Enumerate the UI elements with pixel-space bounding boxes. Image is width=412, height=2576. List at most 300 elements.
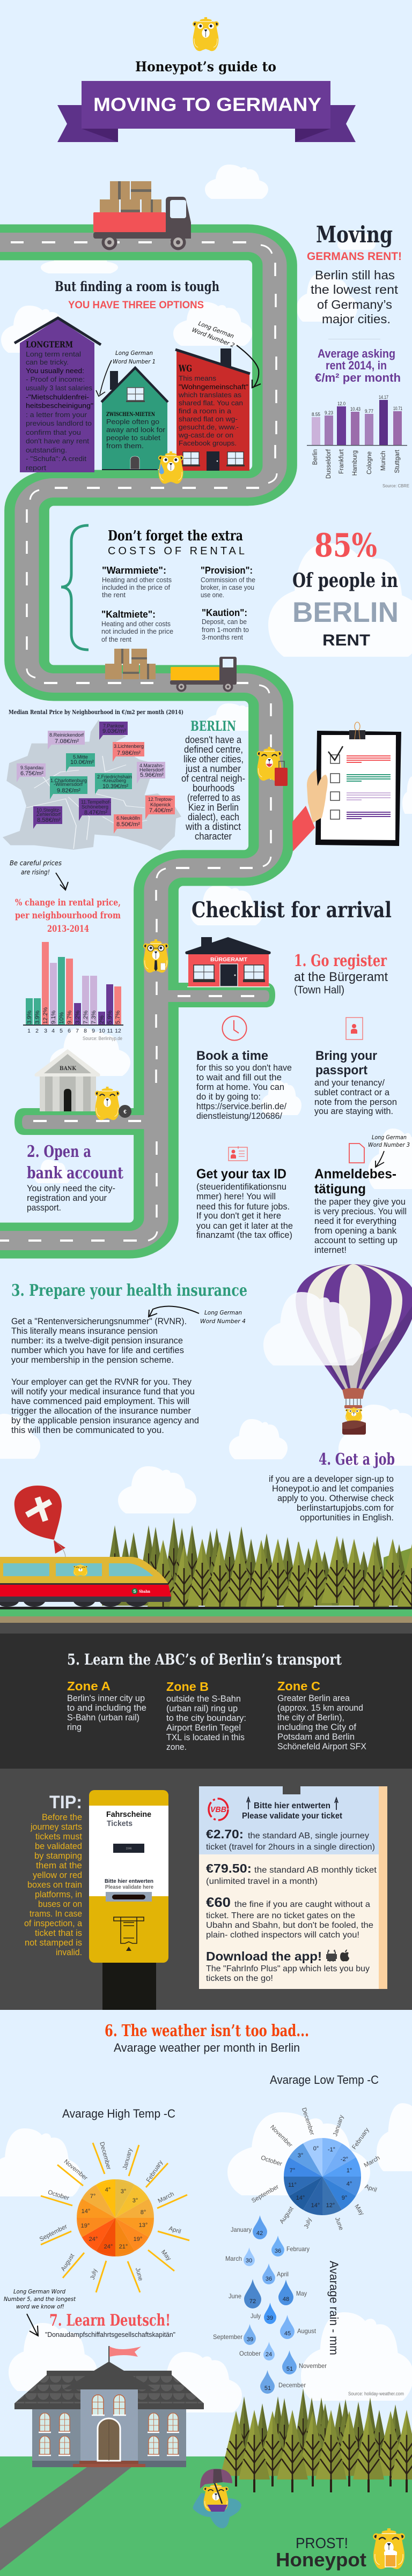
tag: steglitz: 8.58€/m² [37, 817, 61, 823]
step: bring your passport: passport [315, 1063, 367, 1078]
bar chart: change by neighbourhood: 5.9% [107, 1011, 113, 1024]
bear in train window [73, 1564, 87, 1576]
term: kaltmiete: Heating and other costs [101, 620, 171, 628]
wheel values: -1° [328, 2147, 335, 2153]
price: fine: €60 [206, 1895, 231, 1910]
tag: lichtenberg: 7.98€/m² [117, 750, 141, 756]
text block: berlin has no centre: doesn't have a [185, 734, 242, 745]
bar chart: change by neighbourhood: 3.9% [34, 1011, 41, 1024]
term: provision: broker, in case you [201, 584, 254, 591]
step 1: go register: (Town Hall) [294, 984, 344, 996]
price: fine: ticket. There are no ticket gates on the [206, 1911, 355, 1920]
term: kaltmiete: not included in the price [101, 628, 173, 635]
price: single ticket: the standard AB, single journey [248, 1831, 369, 1840]
step: get your tax id: mmer) here! You will [196, 1191, 276, 1201]
drop values: 51 [264, 2385, 271, 2392]
bar chart: change by neighbourhood: 8 [84, 1028, 87, 1034]
sun values: 19° [134, 2236, 142, 2243]
bar chart: change by neighbourhood: 7 [76, 1028, 79, 1034]
term: kaution: "Kaution": [202, 607, 247, 618]
house: longterm: usually 3 last salaries [26, 384, 92, 392]
sun month labels: August [60, 2252, 76, 2273]
tag: pankow: 7.Pankow [103, 723, 124, 729]
icon: document [349, 1144, 364, 1163]
price: monthly ticket: (unlimited travel in a month) [206, 1877, 318, 1886]
ground strip: track, grass, soil [0, 1607, 412, 1623]
panel: finding a room [14, 279, 261, 472]
price: single ticket: €2.70: [206, 1827, 244, 1841]
annotation: long german word 3: Word Number 3 [368, 1142, 410, 1148]
step: get your tax id [196, 1146, 293, 1240]
step: bring your passport: Bring your [315, 1049, 377, 1063]
bar chart: rent by city: 9.23 [325, 410, 333, 415]
zone c: Potsdam and Berlin [277, 1732, 355, 1742]
house: longterm: -"Mietschuldenfrei- [26, 393, 89, 401]
bar chart: change by neighbourhood: 1 [27, 1028, 31, 1034]
text block: berlin has no centre: of central neigh- [181, 773, 245, 784]
text block: rvnr: Your employer can get the RVNR for you. They [11, 1377, 192, 1387]
tag: friedrichshain [95, 773, 132, 795]
price: fine: Ubahn and Sbahn, but don't be fooled, the [206, 1921, 373, 1930]
tag: reinickendorf [48, 731, 85, 749]
logo bear [193, 17, 219, 51]
chart heading [15, 897, 121, 934]
sun values: 8° [141, 2209, 146, 2216]
text block: lowest rent: the lowest rent [311, 283, 399, 296]
forest behind train [102, 1517, 412, 1611]
tag: tempelhof: Schöneberg [82, 804, 108, 810]
bear: worried on the road [158, 451, 183, 484]
drop month labels: May [296, 2290, 307, 2297]
chart: average low temperature wheel: Avarage Low Temp -C [270, 2073, 379, 2087]
drop month labels: February [286, 2245, 310, 2253]
chart heading: €/m² per month [315, 371, 401, 384]
text block: rvnr: number which you have for life and certifies [11, 1345, 184, 1355]
drop values: 30 [246, 2258, 252, 2264]
bar chart: rent by city: 14.17 [379, 395, 388, 400]
step: book a time [196, 1016, 292, 1121]
annotation: prices are rising: Be careful prices [10, 859, 62, 867]
price: single ticket [206, 1827, 375, 1852]
house: longterm: Long term rental [26, 350, 81, 358]
annotation: long german word 4: Word Number 4 [200, 1318, 246, 1325]
house: longterm: previous landlord to [26, 419, 92, 427]
price: fine: the fine if you are caught without a [234, 1900, 370, 1909]
step 7: learn deutsch: "Donaudampfschiffahrtsgesellschaftskapitän" [45, 2330, 175, 2339]
chart heading [315, 347, 401, 384]
tip text: yellow or red [33, 1870, 82, 1880]
tag: neukoelln [114, 814, 142, 834]
tip text: platforms, in [35, 1889, 82, 1899]
bar chart: change by neighbourhood: 9.1% [50, 1011, 57, 1024]
tag: treptow [145, 796, 175, 819]
rain title: Avarage rain - mm [327, 2261, 341, 2355]
tip text [24, 1792, 83, 1957]
tag: reinickendorf: 7.08€/m² [55, 738, 79, 745]
panel: weather heading: 6. The weather isn’t too bad... [105, 2022, 309, 2040]
bar chart: rent by city: Frankfurt [339, 449, 345, 474]
text block: rvnr: this will then be communicated to you. [11, 1425, 164, 1435]
download the app: tickets on the go! [206, 1974, 273, 1983]
house: longterm [14, 318, 101, 472]
house: zwischenmieten: ZWISCHEN-MIETEN [106, 411, 155, 418]
term: kaution [202, 607, 249, 641]
icon: red balloon with swiss cross [14, 1486, 75, 1568]
tip text: buses or on [38, 1899, 82, 1909]
tag: treptow: 7.40€/m² [149, 807, 173, 814]
illustration: ticket validator machine: Please validate here [105, 1884, 153, 1890]
bar chart: change by neighbourhood: 2% [99, 1015, 105, 1024]
term: provision: use one. [201, 591, 224, 599]
heading: germans rent: GERMANS RENT! [307, 250, 402, 263]
annotation: long german word 5 [4, 2288, 76, 2336]
step 2: open a bank account: You only need the city- [27, 1183, 115, 1193]
annotation: long german word 2: Long German [197, 320, 235, 340]
illustration: ticket validator machine: Bitte hier entwerten [105, 1879, 153, 1884]
house: longterm: : a letter from your [26, 411, 87, 419]
term: provision [201, 565, 255, 599]
wheel values: 4° [347, 2181, 352, 2187]
annotation: prices are rising [10, 859, 68, 890]
annotation: long german word 2 [191, 320, 261, 388]
callout: 85 percent rent: BERLIN [292, 597, 399, 628]
text block: rvnr: by the applicable pension insurance agency and [11, 1415, 199, 1426]
text block: lowest rent [311, 268, 399, 326]
wheel month labels [251, 2107, 381, 2231]
step: get your tax id: you can get it later at the [196, 1221, 293, 1231]
download the app: The "FahrInfo Plus" app which lets you buy [206, 1964, 370, 1973]
step: bring your passport: and your tenancy/ [314, 1078, 385, 1088]
wheel month labels: June [334, 2216, 344, 2231]
annotation: long german word 1: Long German [115, 350, 153, 357]
sign-off: Honeypot [276, 2549, 366, 2571]
house: longterm: You usually need: [26, 367, 84, 375]
tag: marzahn [137, 762, 165, 784]
house: wg: wg-cast.de or on [178, 431, 233, 439]
step 3: health insurance: 3. Prepare your health insurance [11, 1281, 247, 1300]
drop month labels: November [299, 2362, 327, 2370]
text block: rvnr [11, 1316, 199, 1435]
bar chart: change by neighbourhood: 12.2% [42, 1007, 49, 1024]
cloud in front of balloon [263, 1292, 363, 1365]
bar chart: change by neighbourhood: 11 [107, 1028, 113, 1034]
drops [244, 2215, 297, 2394]
chart heading: per neighbourhood from [15, 910, 121, 920]
callout: 85 percent rent: RENT [322, 632, 370, 649]
zone b: TXL is located in this [166, 1733, 245, 1742]
panel: percent change chart [15, 897, 123, 1041]
wheel month labels: May [353, 2203, 365, 2217]
step 4: get a job [269, 1450, 395, 1523]
step: anmeldebestaetigung: internet! [314, 1245, 347, 1255]
tag: treptow: Köpenick [150, 802, 171, 808]
panel: weather heading: Avarage weather per month in Berlin [114, 2041, 300, 2054]
heading: Don’t forget the extra [108, 528, 243, 544]
bar chart: change by neighbourhood: Source: Berlinhyp.de [83, 1036, 122, 1041]
annotation: long german word 1 [96, 350, 156, 396]
logo: vbb: VBB [210, 1805, 226, 1814]
tag: spandau: 9.Spandau [20, 765, 43, 771]
house: wg: find a room in a [179, 407, 232, 415]
drop values: 48 [283, 2296, 289, 2303]
wheel month labels: August [278, 2206, 295, 2225]
drop month labels: September [213, 2333, 242, 2341]
icon: id card [229, 1146, 247, 1161]
drop values: 72 [249, 2298, 256, 2305]
drop values: 42 [256, 2230, 263, 2237]
bar chart: change by neighbourhood: 5.7% [115, 1011, 121, 1024]
annotation: long german word 5: Number 5, and the longest [4, 2296, 76, 2303]
zone b: to the city boundary: [166, 1713, 246, 1723]
bar chart: change by neighbourhood: 5 [60, 1028, 63, 1034]
illustration: s-bahn train: Sbahn [139, 1589, 150, 1594]
tag: pankow [99, 722, 128, 740]
drop values: 45 [284, 2330, 291, 2337]
term: warmmiete: "Warmmiete": [102, 565, 166, 576]
step: anmeldebestaetigung [314, 1134, 410, 1255]
house: zwischenmieten: people to sublet [106, 434, 160, 442]
tag: steglitz: Zehlendorf [36, 812, 61, 818]
step 2: open a bank account [27, 1142, 123, 1213]
subheading: COSTS OF RENTAL [108, 545, 245, 557]
tag: pankow: 9.03€/m² [102, 728, 126, 734]
sun month labels: June [134, 2267, 144, 2282]
tag: charlottenburg: -Wilmersdorf [54, 782, 83, 788]
callout: 85 percent rent [292, 527, 399, 649]
annotation: long german word 3: Long German [372, 1134, 407, 1141]
sun month labels: October [47, 2189, 70, 2202]
bar chart: change by neighbourhood [23, 942, 123, 1041]
step: anmeldebestaetigung: tätigung [314, 1182, 366, 1197]
drop values: 24 [266, 2351, 272, 2358]
text block: berlin has no centre: BERLIN [190, 718, 236, 734]
step 4: get a job: Honeypot.io and let companies [272, 1483, 394, 1494]
tip text: ticket that is [35, 1928, 82, 1938]
bar chart: rent by city: 8.55 [312, 412, 320, 417]
bar chart: rent by city: Stuttgart [394, 449, 401, 473]
zone c: (approx. 15 km around [277, 1703, 363, 1713]
lawn [0, 2456, 412, 2576]
annotation: long german word 4: Long German [204, 1309, 242, 1316]
term: warmmiete: Heating and other costs [102, 576, 172, 584]
wheel month labels: January [332, 2114, 345, 2137]
sun month labels: January [122, 2148, 134, 2171]
chart heading: % change in rental price, [15, 897, 121, 908]
tip text: invalid. [56, 1947, 82, 1957]
step: book a time: dienstleistung/120686/ [196, 1111, 282, 1121]
wheel values: 0° [313, 2146, 319, 2152]
bar chart: change by neighbourhood: 12 [115, 1028, 121, 1034]
text block: berlin has no centre: Kiez in Berlin [188, 802, 239, 813]
tag: neukoelln: 8.50€/m² [116, 821, 140, 828]
step 2: open a bank account: bank account [27, 1164, 123, 1183]
drop month labels [213, 2226, 327, 2389]
truck: red [93, 181, 191, 250]
annotation: long german word 2: Word Number 2 [191, 326, 236, 349]
sun month labels: April [168, 2225, 182, 2235]
illustration: s-bahn train: S [133, 1589, 136, 1594]
text block: berlin has no centre: (referred to as [187, 792, 240, 803]
step: book a time: form at home. You can [196, 1082, 284, 1092]
zone b [166, 1680, 246, 1752]
panel: germans rent [307, 221, 409, 488]
heading: 5. Learn the ABC’s of Berlin’s transport [67, 1651, 342, 1668]
download the app: Download the app! [206, 1949, 322, 1963]
sun values: 19° [81, 2223, 90, 2229]
term: provision: Commission of the [201, 576, 255, 584]
zone c: Greater Berlin area [277, 1694, 350, 1703]
zone a [67, 1679, 146, 1732]
text block: lowest rent: Berlin still has [315, 268, 395, 282]
drop month labels: June [229, 2292, 241, 2300]
bar chart: rent by city: Dusseldorf [326, 449, 332, 479]
wheel month labels: April [364, 2184, 378, 2194]
drop month labels: December [278, 2381, 306, 2389]
bar chart: change by neighbourhood: 9 [92, 1028, 95, 1034]
step: book a time: to wait and fill out the [196, 1072, 282, 1082]
text block: berlin has no centre: defined centre, [184, 744, 243, 755]
text block: berlin has no centre: with a distinct [185, 821, 241, 832]
step 7: learn deutsch: 7. Learn Deutsch! [49, 2311, 171, 2330]
house: wg: shared flat on wg- [179, 415, 238, 423]
zone c: the city of Berlin), [277, 1713, 344, 1723]
step: get your tax id: need this for future jobs. [196, 1201, 290, 1212]
text block: rvnr: have commenced paid employment. This will [11, 1396, 189, 1406]
panel: extra costs [61, 525, 255, 650]
term: kaltmiete: "Kaltmiete": [101, 609, 156, 620]
wheel values: 1° [347, 2167, 352, 2174]
tag: neukoelln: 6.Neukölln [116, 815, 140, 821]
house: longterm: confirm that you [26, 428, 81, 436]
step: book a time: https://service.berlin.de/ [196, 1101, 286, 1111]
term: provision: "Provision": [201, 565, 253, 576]
tip text: trams. In case [30, 1909, 82, 1919]
price: monthly ticket [206, 1861, 377, 1886]
sun values: 24° [89, 2236, 98, 2243]
bear in basket [345, 1407, 362, 1422]
logo: vbb [209, 1799, 228, 1820]
step: anmeldebestaetigung: Anmeldebes- [314, 1167, 396, 1182]
tag: friedrichshain: -Kreuzberg [102, 778, 126, 784]
zone b: Airport Berlin Tegel [166, 1723, 241, 1733]
illustration: buergeramt building: BÜRGERAMT [210, 956, 248, 963]
price: fine [206, 1895, 373, 1940]
icon: apple [340, 1949, 349, 1962]
drop values: 51 [286, 2366, 293, 2372]
text block: berlin has no centre: bourhoods [193, 783, 234, 793]
sun month labels: May [160, 2249, 172, 2262]
step: anmeldebestaetigung: account to setting up [314, 1235, 398, 1245]
sun values: 3° [121, 2188, 126, 2195]
ribbon banner [57, 81, 356, 142]
step 3: health insurance [11, 1281, 247, 1435]
house: wg: This means [179, 374, 217, 382]
step: book a time: do it by going to: [196, 1092, 261, 1102]
house: wg [175, 348, 250, 471]
text block: berlin has no centre: like other cities, [183, 754, 244, 764]
price: fine: plain- clothed inspectors will catch you! [206, 1931, 359, 1940]
tip text: of inspection, a [24, 1918, 83, 1928]
bar chart: change by neighbourhood: 2 [35, 1028, 39, 1034]
step: anmeldebestaetigung: the paper they give you [314, 1197, 406, 1207]
heading: moving: Moving [316, 221, 393, 248]
drop values: 36 [275, 2248, 281, 2254]
tag: steglitz [33, 806, 62, 829]
bar chart: rent by city [307, 395, 409, 488]
step 2: open a bank account: registration and your [27, 1193, 107, 1203]
subheading: YOU HAVE THREE OPTIONS [68, 300, 204, 311]
tag: tempelhof: 11.Tempelhof- [81, 799, 111, 805]
house: longterm: - "Schufa": A credit [26, 455, 86, 463]
zone a: ring [67, 1723, 82, 1732]
annotation: long german word 4 [149, 1306, 246, 1325]
illustration: s-bahn train [0, 1557, 171, 1607]
tip text: tickets must [35, 1831, 82, 1842]
tip text: be validated [35, 1841, 82, 1851]
step: book a time: for this so you don't have [196, 1063, 292, 1073]
tag: lichtenberg: 3.Lichtenberg [114, 744, 144, 749]
chart heading: Average asking [318, 347, 395, 360]
illustration: buergeramt building [185, 937, 271, 988]
tag: charlottenburg [50, 776, 87, 799]
sign-off: PROST! [296, 2535, 348, 2551]
road winding down the page [0, 242, 277, 1241]
house: longterm: can be tricky. [26, 358, 69, 366]
bar chart: change by neighbourhood: 3 [44, 1028, 47, 1034]
house: longterm: heitsbescheinigung" [26, 402, 93, 410]
bar chart: change by neighbourhood: 10 [99, 1028, 105, 1034]
annotation: long german word 5: word we know of! [16, 2303, 64, 2310]
sun month labels: March [157, 2191, 175, 2204]
heading: But finding a room is tough [55, 279, 219, 294]
zone c: Zone C [277, 1679, 320, 1693]
icon: passport [346, 1018, 363, 1040]
annotation: long german word 1: Word Number 1 [113, 358, 156, 365]
tag: tempelhof: 8.47€/m² [84, 810, 107, 816]
house: wg: which translates as [178, 391, 242, 399]
sun month labels: July [90, 2268, 99, 2281]
panel: neighbourhood map [3, 708, 183, 851]
wheel month labels: September [251, 2184, 280, 2204]
sun values: 14° [82, 2208, 90, 2215]
zone b: (urban rail) ring up [166, 1704, 238, 1713]
bar chart: change by neighbourhood: 9.7% [67, 1011, 73, 1024]
sun values: 24° [104, 2244, 113, 2250]
tip text: journey starts [30, 1822, 82, 1832]
text block: berlin has no centre: dialect), each [188, 812, 239, 822]
wheel month labels: February [351, 2127, 371, 2151]
zone c [277, 1679, 366, 1751]
step: anmeldebestaetigung: from opening a bank [314, 1226, 396, 1236]
text block: rvnr: This literally means insurance pension [11, 1326, 158, 1336]
tag: spandau [17, 763, 46, 782]
wheel values: 14° [296, 2195, 305, 2201]
wheel month labels: October [260, 2155, 283, 2167]
house: zwischenmieten: from them. [106, 442, 144, 450]
wheel slices [284, 2138, 361, 2215]
term: kaution: 3-months rent [202, 634, 244, 641]
drop month labels: March [225, 2255, 242, 2262]
term: kaltmiete [101, 609, 173, 643]
tag: friedrichshain: 10.39€/m² [102, 783, 128, 790]
tip text: boxes on train [27, 1880, 82, 1890]
zone c: Schönefeld Airport SFX [277, 1742, 366, 1751]
map heading: Median Rental Price by Neighbourhood in €/m2 per month (2014) [9, 708, 183, 716]
wheel values: 12° [326, 2202, 335, 2209]
drop month labels: January [231, 2226, 252, 2233]
chart: average rain drops [213, 2215, 404, 2396]
step 4: get a job: berlinstartupjobs.com for [297, 1503, 394, 1513]
